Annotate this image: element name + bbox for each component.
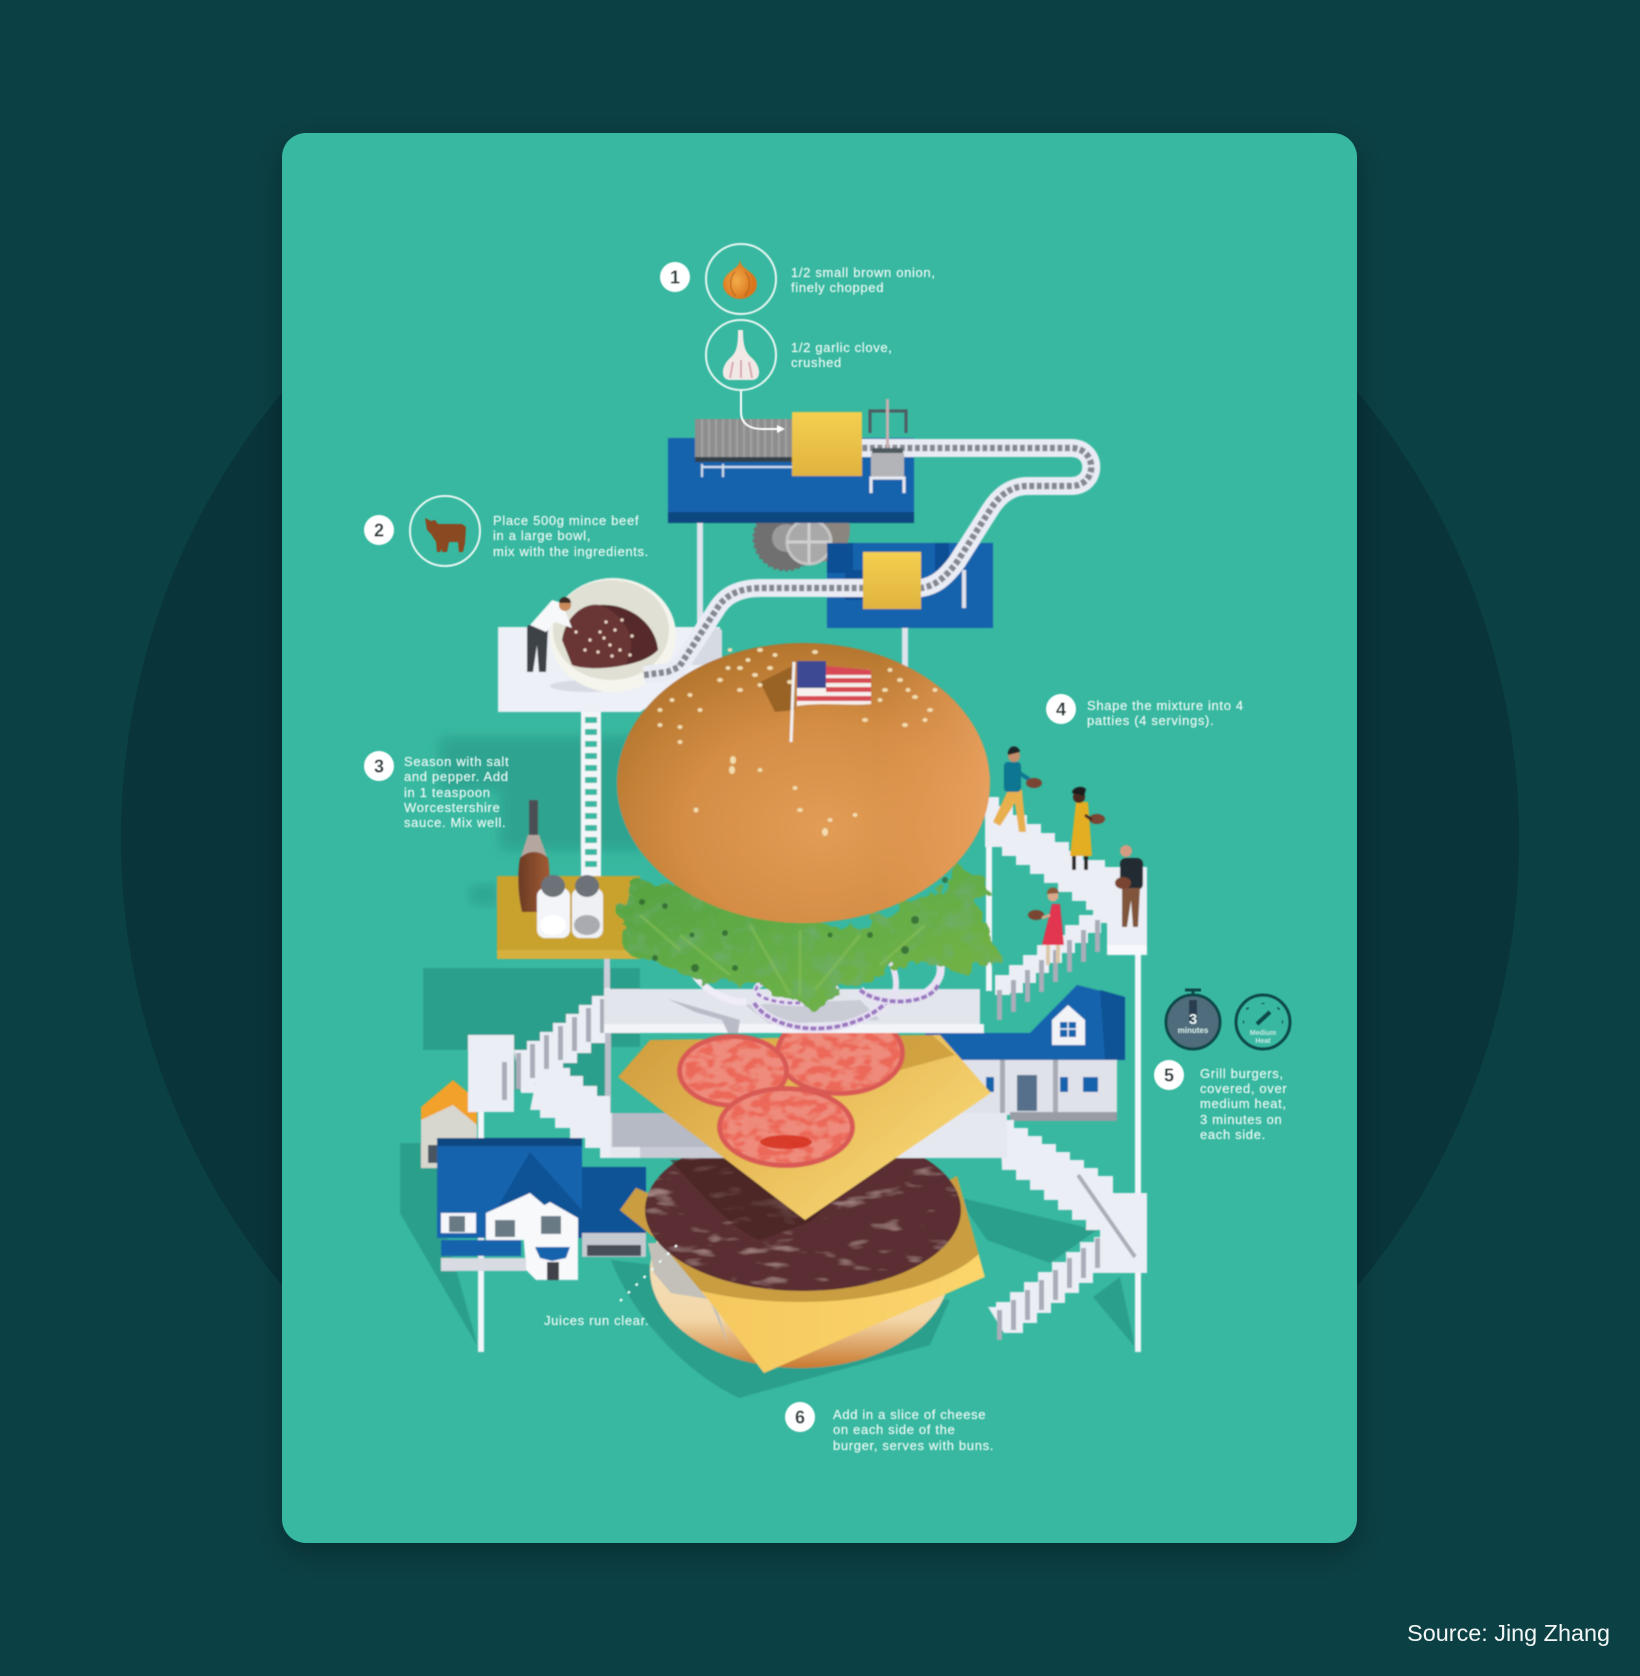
text: garlic: 1/2 garlic clove, (791, 340, 893, 355)
yellow box lower (863, 552, 921, 609)
lower white platform (610, 1113, 1007, 1158)
person yellow dress (1070, 787, 1105, 870)
house right (925, 985, 1125, 1121)
main teal card (282, 133, 1357, 1543)
source credit: Source: Jing Zhang (1407, 1620, 1610, 1646)
conveyor belt white (644, 448, 1091, 675)
stairs (468, 797, 1147, 1333)
text: step 6: Add in a slice of cheese (833, 1407, 986, 1422)
step 2: beef (364, 496, 649, 566)
icon: stopwatch: minutes (1178, 1026, 1209, 1035)
text: step 3: sauce. Mix well. (404, 815, 506, 830)
step 1: ingredients (660, 244, 936, 433)
text: step 5: Grill burgers, (1200, 1066, 1284, 1081)
poles (478, 523, 1141, 1352)
yellow shelf (497, 876, 640, 959)
american flag (791, 661, 871, 742)
text: step 4: Shape the mixture into 4 (1087, 698, 1244, 713)
text: step 6: burger, serves with buns. (833, 1438, 994, 1453)
text: step 2: mix with the ingredients. (493, 544, 649, 559)
badge 6: 6 (795, 1408, 805, 1428)
step 3 (364, 751, 509, 830)
blue house (437, 1138, 646, 1280)
badge 5: 5 (1164, 1066, 1174, 1086)
step 5 (1154, 990, 1290, 1142)
ladder (581, 712, 601, 877)
text: step 5: covered, over (1200, 1081, 1287, 1096)
gears (754, 498, 850, 570)
text: step 3: Season with salt (404, 754, 509, 769)
badge 1: 1 (670, 268, 680, 288)
press machine (870, 399, 906, 493)
text: step 4: patties (4 servings). (1087, 713, 1214, 728)
badge 6 (785, 1402, 815, 1432)
blue platform lower (827, 543, 993, 628)
text: step 3: in 1 teaspoon (404, 785, 491, 800)
lettuce (618, 868, 1000, 1006)
illustration: burger building (400, 399, 1147, 1398)
text: garlic: crushed (791, 355, 842, 370)
bottom cheese (618, 1175, 986, 1374)
bun grey shade (648, 1243, 729, 1347)
arrow: ingredients into machine (741, 391, 785, 433)
icon: heat dial (1236, 995, 1290, 1049)
badge 4: 4 (1056, 700, 1066, 720)
badge 1 (660, 262, 690, 292)
sesame seeds (658, 648, 938, 836)
text: step 6: on each side of the (833, 1422, 955, 1437)
top cheese (618, 1035, 991, 1220)
bowl of mince (550, 578, 676, 692)
stair risers (502, 920, 1135, 1340)
text: step 2: in a large bowl, (493, 528, 591, 543)
dark background circle (121, 140, 1519, 1538)
icon: cow (410, 496, 480, 566)
person red dress (1028, 887, 1064, 965)
icon: stopwatch: 3 (1189, 1011, 1197, 1028)
bottom bun (650, 1172, 950, 1368)
badge 2 (364, 515, 394, 545)
cast shadows (400, 737, 1135, 1398)
step 4 (1046, 694, 1244, 728)
white platform with bowl (498, 622, 722, 712)
tomato slices (677, 1010, 905, 1168)
beef patty (645, 1129, 961, 1291)
step 6 (785, 1402, 994, 1453)
sauce bottle (518, 800, 549, 912)
person dark sweater (1115, 845, 1143, 927)
badge 3: 3 (374, 756, 384, 776)
pepper shaker (572, 875, 603, 938)
upper white platform (604, 989, 984, 1033)
icon: onion (706, 244, 776, 314)
text: step 2: Place 500g mince beef (493, 513, 639, 528)
icon: garlic (706, 320, 776, 390)
text: onion: finely chopped (791, 280, 884, 295)
badge 5 (1154, 1060, 1184, 1090)
badge 4 (1046, 694, 1076, 724)
juices callout (544, 1245, 677, 1328)
grey ingredient conveyor (695, 419, 793, 477)
person teal with patty (993, 746, 1042, 832)
salt shaker (537, 875, 570, 938)
icon: stopwatch (1166, 990, 1220, 1049)
flag shadow (760, 665, 795, 712)
badge 2: 2 (374, 520, 384, 540)
text: step 5: each side. (1200, 1127, 1266, 1142)
text: step 5: 3 minutes on (1200, 1112, 1282, 1127)
text: step 3: and pepper. Add (404, 769, 509, 784)
blue platform top (668, 438, 914, 523)
text: step 5: medium heat, (1200, 1096, 1287, 1111)
text: onion: 1/2 small brown onion, (791, 265, 936, 280)
badge 3 (364, 751, 394, 781)
chef person (527, 597, 572, 672)
text: step 3: Worcestershire (404, 800, 500, 815)
onion rings (693, 957, 941, 1029)
juices callout: Juices run clear. (544, 1313, 649, 1328)
yellow box upper (792, 412, 862, 476)
conveyor belt links (644, 448, 1091, 675)
icon: heat dial: Medium (1250, 1030, 1276, 1037)
icon: heat dial: Heat (1255, 1038, 1271, 1045)
top bun (617, 643, 990, 923)
house orange background (421, 1080, 477, 1168)
